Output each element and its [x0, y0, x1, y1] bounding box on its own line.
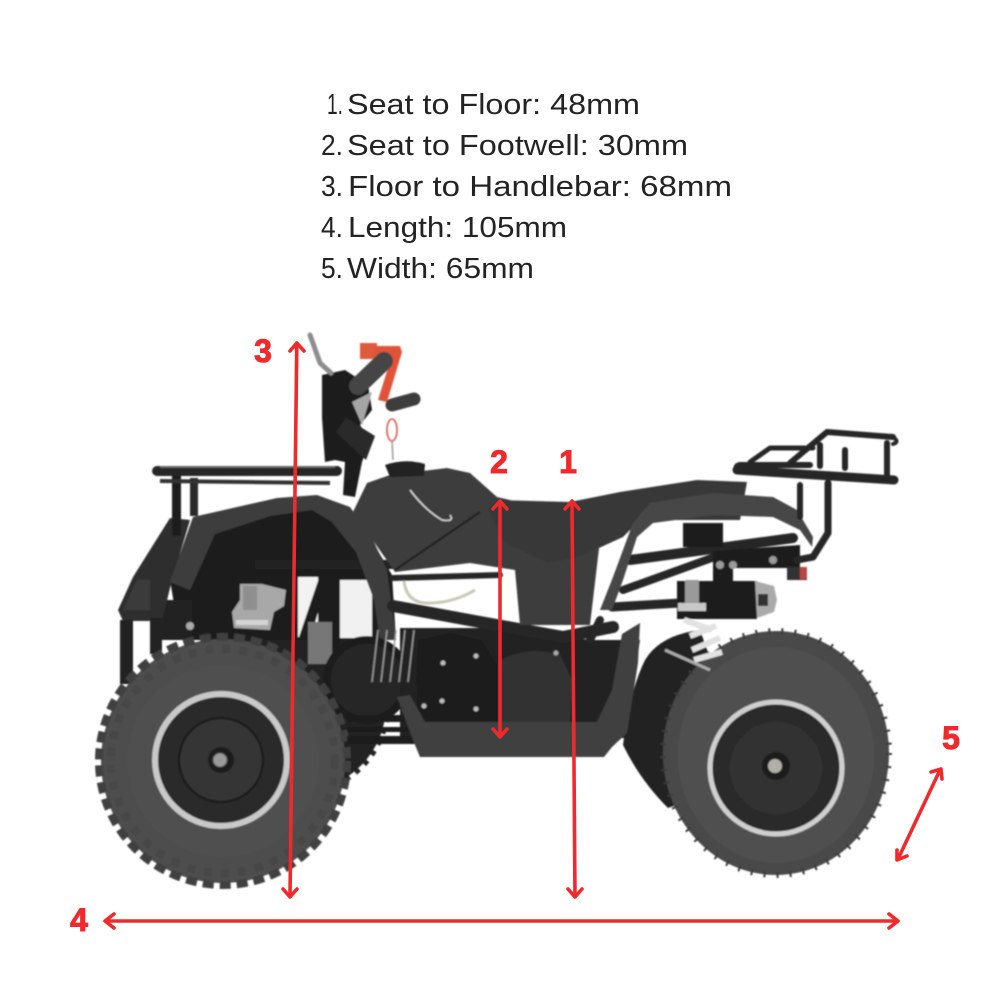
- engine: [372, 580, 572, 722]
- brake lever: [310, 335, 331, 373]
- engine bay backing: [400, 628, 640, 738]
- gear cover: [500, 651, 572, 722]
- main frame tubes: [393, 538, 793, 640]
- fuel lines: [404, 580, 475, 603]
- rear inner wheel: [213, 618, 387, 792]
- arrow 5 width: [897, 769, 942, 860]
- list item 5: Width: 65mm: [347, 253, 534, 285]
- footwell: [397, 623, 640, 757]
- front fender: [170, 495, 396, 640]
- lanyard loop: [387, 419, 397, 441]
- left grip: [358, 361, 384, 386]
- front inner wheel: [623, 630, 725, 808]
- front wheel: [99, 637, 347, 885]
- steering column: [322, 370, 375, 497]
- arrow 1 seat to floor: [565, 501, 582, 897]
- list item 5: 5.: [321, 253, 343, 285]
- list item 3: 3.: [321, 171, 343, 203]
- fuel cap: [385, 461, 425, 477]
- fuel tank and side panel: [353, 461, 600, 625]
- front rack: [157, 467, 337, 536]
- crank case: [416, 633, 497, 722]
- list item 1: Seat to Floor: 48mm: [347, 89, 640, 121]
- label 2: 2: [490, 444, 508, 480]
- label 1: 1: [559, 444, 577, 480]
- label 3: 3: [254, 333, 272, 369]
- axle links: [347, 715, 417, 744]
- right grip: [392, 399, 414, 405]
- list item 2: 2.: [321, 130, 343, 162]
- front rim: [155, 694, 287, 826]
- handlebar assembly: [310, 335, 414, 497]
- quad bike illustration: [99, 335, 896, 885]
- arrow 2 seat to footwell: [493, 501, 507, 737]
- muffler: [677, 581, 777, 619]
- arrow 4 length: [105, 914, 898, 928]
- list item 1: 1.: [327, 89, 343, 121]
- dimensions list: [321, 89, 732, 285]
- front bumper: [118, 518, 190, 684]
- rear fender: [600, 493, 813, 610]
- rear shock: [665, 580, 722, 670]
- label 4: 4: [70, 902, 88, 938]
- red lanyard: [375, 346, 402, 402]
- rear inner wheel guard: [327, 640, 407, 720]
- arrow 3 floor to handlebar: [283, 343, 304, 897]
- rear rim: [710, 702, 842, 834]
- seat: [487, 480, 747, 563]
- rear wheel: [663, 631, 889, 875]
- list item 4: 4.: [321, 212, 343, 244]
- front shock and carburettor: [186, 584, 286, 630]
- kill switch: [360, 343, 377, 359]
- rear rack: [736, 432, 896, 560]
- list item 2: Seat to Footwell: 30mm: [347, 130, 688, 162]
- front chassis interior: [160, 500, 405, 664]
- list item 3: Floor to Handlebar: 68mm: [348, 171, 732, 203]
- label 5: 5: [942, 720, 960, 756]
- rear frame bracket: [683, 523, 800, 582]
- list item 4: Length: 105mm: [348, 212, 567, 244]
- tail light: [787, 567, 807, 580]
- cooling fins: [372, 630, 414, 682]
